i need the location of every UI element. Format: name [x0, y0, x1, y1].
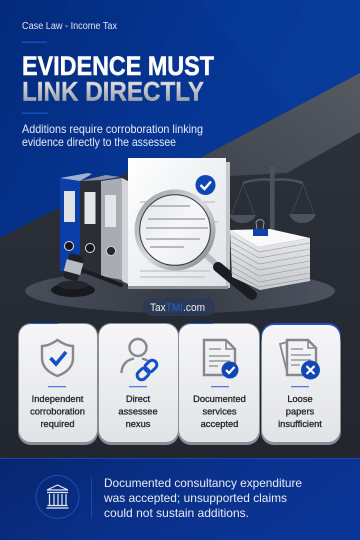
label [278, 394, 322, 429]
conclusion text: Documented consultancy expenditure [104, 476, 302, 490]
icon: shield check [42, 340, 73, 376]
icon: document check [204, 340, 238, 378]
logo: TaxTMI.com: TaxTMI.com [150, 302, 205, 314]
panel: direct assessee nexus [98, 323, 179, 445]
label: services [202, 406, 237, 416]
conclusion text [103, 476, 302, 520]
icon: scales of justice [229, 166, 316, 232]
accent rule [48, 386, 66, 387]
panel: independent corroboration [18, 323, 98, 445]
logo: TaxTMI.com [143, 298, 215, 316]
document with check badge [128, 158, 230, 289]
conclusion text: could not sustain additions. [104, 506, 249, 520]
label: assessee [118, 406, 158, 416]
icon: binders [60, 173, 128, 284]
label: required [40, 419, 75, 429]
label: insufficient [278, 419, 322, 429]
eyebrow accent rule [22, 42, 47, 43]
accent rule [211, 386, 229, 387]
icon: courthouse [36, 476, 79, 518]
label [30, 394, 85, 429]
subtitle: Additions require corroboration linking [22, 122, 203, 136]
icon: paper stack with clip [230, 220, 310, 290]
conclusion text: was accepted; unsupported claims [103, 491, 287, 505]
label: Direct [126, 394, 151, 404]
panel: loose papers [261, 323, 341, 445]
title: EVIDENCE MUST [22, 51, 214, 81]
icon: gavel [51, 253, 121, 297]
label [118, 394, 158, 429]
icon: person with link [122, 339, 159, 382]
subtitle: evidence directly to the assessee [22, 135, 176, 149]
label [193, 394, 246, 429]
label: Independent [32, 394, 84, 404]
panel: conclusion band [0, 458, 360, 540]
label: accepted [201, 419, 238, 429]
eyebrow: case law label: Case Law - Income Tax [22, 21, 117, 32]
label: corroboration [30, 406, 85, 416]
subtitle [22, 122, 203, 149]
label: nexus [126, 419, 151, 429]
icon: check badge [196, 175, 216, 195]
illustration: evidence scene [25, 158, 335, 316]
label: Documented [193, 394, 246, 404]
icon: magnifying glass [137, 192, 252, 295]
label: papers [286, 406, 315, 416]
title [22, 51, 214, 106]
icon: loose papers with cross [280, 340, 320, 380]
panel: documented services [178, 323, 260, 445]
accent rule [129, 386, 147, 387]
accent rule [291, 386, 309, 387]
title: LINK DIRECTLY [22, 76, 204, 106]
label: Loose [287, 394, 313, 404]
platform [25, 269, 335, 313]
title accent rule [22, 112, 48, 114]
divider [90, 477, 93, 518]
